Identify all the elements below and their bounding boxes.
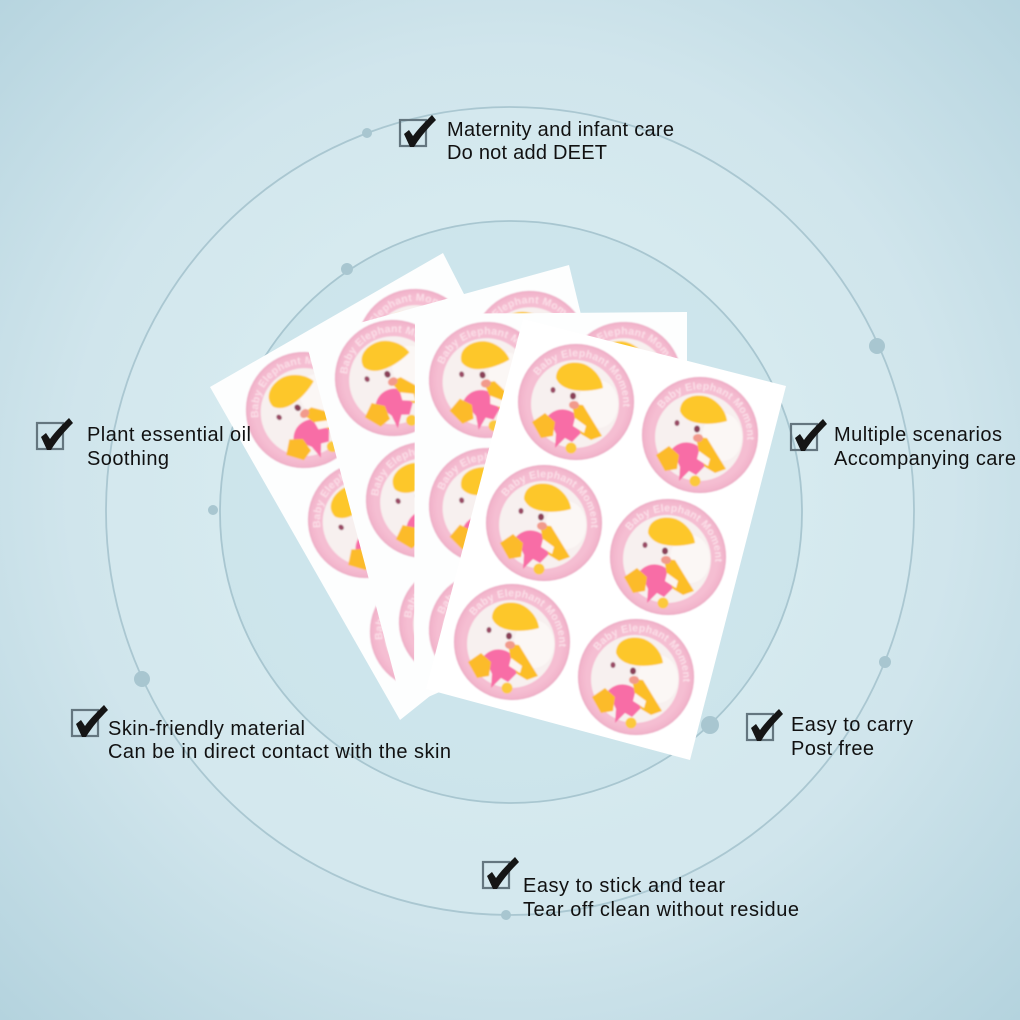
- feature: easy to carry: Easy to carry: [791, 714, 913, 736]
- feature: skin-friendly material: [72, 705, 451, 763]
- feature: plant essential oil: Soothing: [87, 448, 169, 470]
- feature: plant essential oil: Plant essential oil: [87, 424, 251, 446]
- feature: plant essential oil: [37, 418, 251, 470]
- feature: maternity and infant care: [400, 115, 674, 164]
- sticker sheet 3: [414, 309, 695, 701]
- feature: multiple scenarios: Accompanying care: [834, 448, 1016, 470]
- concentric rings: [106, 107, 914, 920]
- feature: maternity and infant care: Do not add DEET: [447, 142, 607, 164]
- feature: multiple scenarios: Multiple scenarios: [834, 424, 1002, 446]
- feature: maternity and infant care: Maternity and infant care: [447, 119, 674, 141]
- feature: easy to stick and tear: Easy to stick and tear: [523, 875, 725, 897]
- feature: easy to stick and tear: [483, 857, 799, 921]
- sticker sheet 1: [210, 253, 600, 720]
- feature: easy to stick and tear: Tear off clean without residue: [523, 899, 799, 921]
- sticker sheet 2: [305, 265, 650, 708]
- feature: multiple scenarios: [791, 419, 1016, 470]
- feature: skin-friendly material: Skin-friendly material: [108, 718, 305, 740]
- feature: easy to carry: Post free: [791, 738, 874, 760]
- feature: easy to carry: [747, 709, 913, 760]
- sticker sheet 4 (front): [426, 319, 786, 760]
- feature: skin-friendly material: Can be in direct contact with the skin: [108, 741, 451, 763]
